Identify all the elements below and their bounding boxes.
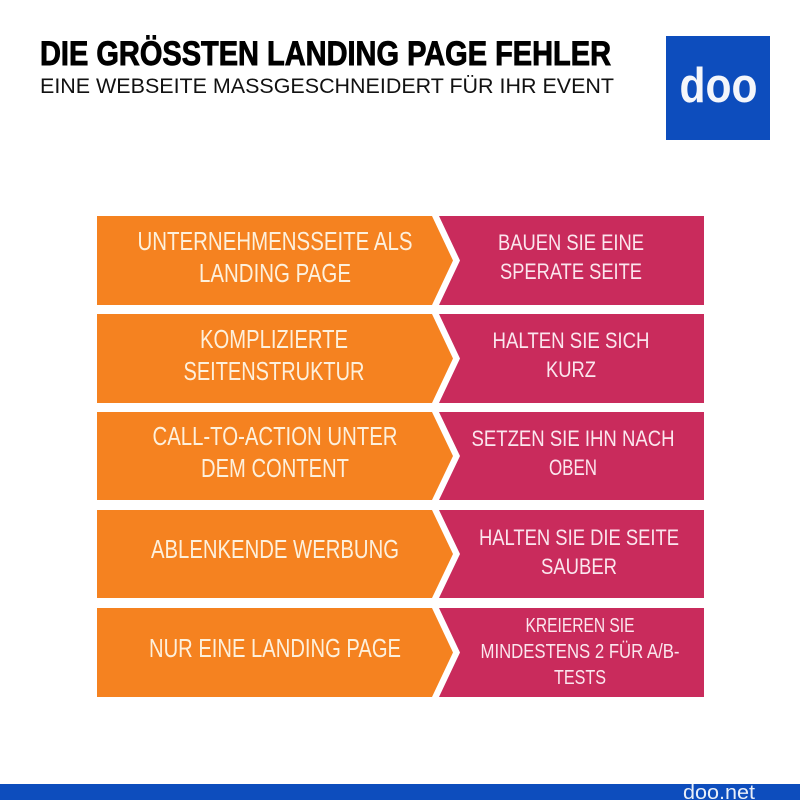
mistake arrow 1: UNTERNEHMENSSEITE ALS xyxy=(138,228,412,256)
footer bar xyxy=(0,781,800,800)
mistake arrow 2 xyxy=(97,314,453,403)
solution panel 4: SAUBER xyxy=(541,554,617,579)
mistake arrow 3: DEM CONTENT xyxy=(201,455,349,483)
solution panel 3 xyxy=(439,412,704,500)
solution panel 3: SETZEN SIE IHN NACH xyxy=(472,426,674,451)
solution panel 5: TESTS xyxy=(554,667,606,689)
row 5 xyxy=(97,608,704,697)
solution panel 1: SPERATE SEITE xyxy=(500,259,642,284)
mistake arrow 1: LANDING PAGE xyxy=(199,260,351,288)
mistake arrow 4: ABLENKENDE WERBUNG xyxy=(151,536,399,564)
row 4 xyxy=(97,510,704,598)
logo: doo xyxy=(666,36,770,140)
mistake arrow 3 xyxy=(97,412,453,500)
mistake arrow 5: NUR EINE LANDING PAGE xyxy=(149,635,401,663)
logo: doo: doo xyxy=(680,59,758,113)
row 3 xyxy=(97,412,704,500)
solution panel 5: KREIEREN SIE xyxy=(526,615,634,637)
mistake arrow 3: CALL-TO-ACTION UNTER xyxy=(152,423,398,451)
solution panel 4 xyxy=(439,510,704,598)
solution panel 3: OBEN xyxy=(549,455,597,480)
row 1 xyxy=(97,216,704,305)
solution panel 2 xyxy=(439,314,704,403)
mistake arrow 1 xyxy=(97,216,453,305)
solution panel 4: HALTEN SIE DIE SEITE xyxy=(479,525,679,550)
solution panel 5 xyxy=(439,608,704,697)
title: DIE GRÖSSTEN LANDING PAGE FEHLER xyxy=(40,34,611,73)
mistake arrow 2: KOMPLIZIERTE xyxy=(200,326,348,354)
solution panel 2: HALTEN SIE SICH xyxy=(492,328,650,353)
subtitle: EINE WEBSEITE MASSGESCHNEIDERT FÜR IHR EVENT xyxy=(40,75,614,98)
solution panel 5: MINDESTENS 2 FÜR A/B- xyxy=(480,641,680,663)
solution panel 1 xyxy=(439,216,704,305)
solution panel 1: BAUEN SIE EINE xyxy=(498,230,644,255)
mistake arrow 5 xyxy=(97,608,453,697)
solution panel 2: KURZ xyxy=(546,357,596,382)
mistake arrow 2: SEITENSTRUKTUR xyxy=(184,358,364,386)
mistake arrow 4 xyxy=(97,510,453,598)
row 2 xyxy=(97,314,704,403)
